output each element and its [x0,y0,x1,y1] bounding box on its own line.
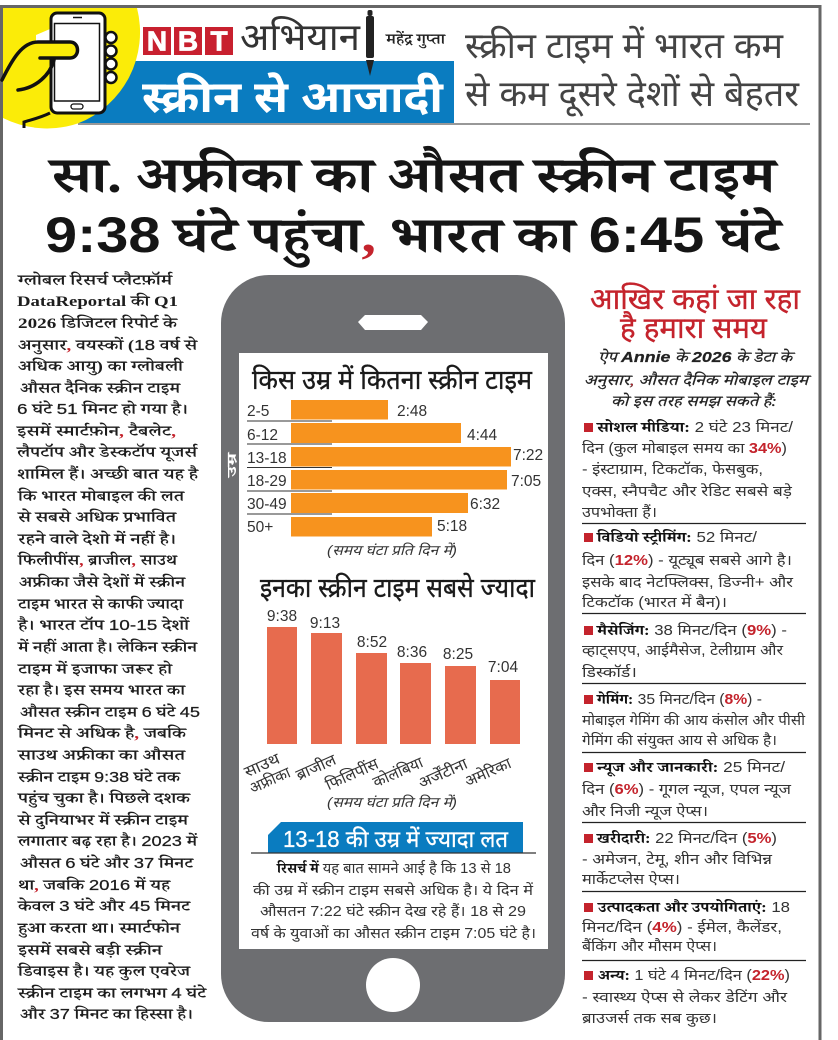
right column heading: आखिर कहां जा रहा [590,282,801,316]
left article text: स्क्रीन टाइम का लगभग 4 घंटे [17,984,207,1002]
item: productivity and utilities: बैंकिंग और मौसम ऐप्स। [582,937,717,955]
left article text: मिनट से अधिक है , जबकि [17,724,187,742]
item: news and information: दिन ( 6%) - गूगल न्यूज, एपल न्यूज [582,781,791,799]
item: shopping: खरीदारी: 22 मिनट/दिन ( 5%) [596,830,777,847]
item: messaging [582,621,787,681]
bar chart: countries: 7:04 [488,659,518,676]
bar chart: countries [242,608,520,797]
bar chart: screen time by age [247,400,543,536]
bar chart: screen time by age: 7:22 [513,447,543,464]
callout text [251,859,536,943]
item: gaming [582,690,805,750]
item: gaming: मोबाइल गेमिंग की आय कंसोल और पीसी [582,711,805,729]
callout text: की उम्र में स्क्रीन टाइम सबसे अधिक है। ये दिन में [253,881,533,899]
bar chart: screen time by age: 2:48 [397,403,427,420]
callout text: औसतन 7:22 घंटे स्क्रीन देख रहे हैं। 18 से 29 [260,902,526,920]
bar chart: countries: अमेरिका [462,753,515,791]
left article text: अधिक आयु) का ग्लोबली [18,358,184,376]
bar chart: screen time by age: 6-12 [247,427,278,444]
header subheading [465,25,800,117]
chart note: hours per day: (समय घंटा प्रति दिन में) [327,794,457,810]
callout heading: teen addiction: 13-18 की उम्र में ज्यादा लत [283,826,509,852]
item: social media: एक्स, स्नैपचैट और रेडिट सबसे बड़े [582,482,792,500]
NBT logo: B [178,26,198,56]
left article text: और 37 मिनट का हिस्सा है। [20,1005,193,1023]
header rule [78,123,810,125]
left article text: लगातार बढ़ रहा है। 2023 में [17,832,199,850]
left article text: रहने वाले देशो में नहीं है। [17,530,176,548]
item: video streaming: विडियो स्ट्रीमिंग: 52 मिनट/ [596,528,758,546]
item: video streaming [582,528,794,611]
left article text: पहुंच चुका है। पिछले दशक [17,789,191,808]
left article text: लैपटॉप और डेस्कटॉप यूजर्स [16,443,198,462]
header subheading: स्क्रीन टाइम में भारत कम [465,25,784,66]
right column heading [590,282,801,345]
left article text: फिलीपींस , ब्राजील , साउथ [17,551,178,569]
bar chart: screen time by age: 13-18 [247,450,287,467]
left article text: 6 घंटे 51 मिनट हो गया है। [17,400,188,418]
item: messaging: व्हाट्सएप, आईमैसेज, टेलीग्राम और [582,641,784,660]
left article text: डिवाइस है। यह कुल एवरेज [17,962,192,981]
left article text: में नहीं आता है। लेकिन स्क्रीन [17,638,198,656]
item: productivity and utilities: उत्पादकता और उपयोगिताएं: 18 [597,899,790,916]
NBT logo [143,26,233,56]
bar chart: screen time by age: 4:44 [467,427,498,444]
left article text: औसत स्क्रीन टाइम 6 घंटे 45 [20,703,200,721]
left article text: 2026 डिजिटल रिपोर्ट के [18,314,178,332]
left article text: हुआ करता था। स्मार्टफोन [17,919,181,938]
left article text: कि भारत मोबाइल की लत [17,487,186,505]
item: social media: उपभोक्ता हैं। [582,504,657,521]
item: others: - स्वास्थ्य ऐप्स से लेकर डेटिंग और [582,988,788,1006]
item: others: अन्य: 1 घंटे 4 मिनट/दिन ( 22% ) [598,966,790,984]
item: social media [582,418,794,521]
left article text: केवल 3 घंटे और 45 मिनट [17,897,191,915]
bar chart: countries: ब्राजील [293,750,339,784]
bar chart: countries: 8:25 [443,646,473,663]
left article text: है। भारत टॉप 10-15 देशों [17,616,190,634]
item: messaging: डिस्कॉर्ड। [582,664,637,681]
item: shopping: मार्केटप्लेस ऐप्स। [582,870,680,888]
bar chart: countries: अफ्रीका [247,763,294,797]
callout heading: teen addiction [251,822,536,853]
item: social media: - इंस्टाग्राम, टिकटॉक, फेसबुक, [582,460,763,479]
chart heading: highest screen time: इनका स्क्रीन टाइम सबसे ज्यादा [260,572,536,603]
panel: phone body [221,275,565,1022]
left article text: टाइम में इजाफा जरूर हो [17,660,173,678]
icon: hand holding phone on yellow circle [2,8,140,128]
left article text: रहा है। इस समय भारत का [17,681,186,699]
bar chart: countries: साउथ [242,750,284,781]
right column intro: को इस तरह समझ सकते हैं: [611,392,777,410]
item: messaging: मैसेजिंग: 38 मिनट/दिन ( 9%) - [596,621,787,639]
left article text: साउथ अफ्रीका का औसत [17,746,187,764]
campaign name: अभियान [240,15,361,59]
left article text: ग्लोबल रिसर्च प्लैटफ़ॉर्म [17,271,174,289]
left article text: औसत दैनिक स्क्रीन टाइम [20,379,182,397]
bar chart: screen time by age: 7:05 [511,473,541,490]
item: gaming: गेमिंग: 35 मिनट/दिन ( 8%) - [596,690,762,708]
left article text: इसमें सबसे बड़ी स्क्रीन [17,941,163,959]
item: productivity and utilities [582,899,790,955]
bar chart: screen time by age: 2-5 [247,403,269,420]
right column heading: है हमारा समय [620,310,768,345]
left article text [16,271,207,1023]
right column intro: अनुसार , औसत दैनिक मोबाइल टाइम [584,371,812,390]
left article text: स्क्रीन टाइम 9:38 घंटे तक [17,768,181,786]
item: news and information: और निजी न्यूज ऐप्स। [582,802,708,821]
left article text: अनुसार , वयस्कों ( 18 वर्ष से [18,336,198,355]
right column intro: ऐप Annie के 2026 के डेटा के [598,348,796,366]
bar chart: screen time by age: 18-29 [247,473,287,490]
chart note: hours per day: (समय घंटा प्रति दिन में) [327,542,457,558]
item: others [582,966,790,1028]
icon: pen [366,10,374,76]
item: video streaming: दिन ( 12% ) - यूट्यूब सबसे आगे है। [582,551,792,570]
left article text: अफ्रीका जैसे देशों में स्क्रीन [19,573,186,591]
bar chart: countries: 9:13 [310,615,340,632]
bar chart: countries: फिलिपींस [323,755,382,794]
campaign title: स्क्रीन से आजादी [142,71,444,122]
left article text: शामिल हैं। अच्छी बात यह है [17,465,200,483]
callout text: रिसर्च में यह बात सामने आई है कि 13 से 18 [276,859,511,877]
chart heading: screen time by age: किस उम्र में कितना स्क्रीन टाइम [252,364,533,395]
item: shopping [582,830,777,888]
bar chart: countries: कोलंबिया [370,753,427,791]
left article text: था, जबकि 2016 में यह [18,876,172,894]
bar chart: screen time by age: 30-49 [247,496,287,513]
left article text: औसत 6 घंटे और 37 मिनट [20,854,194,872]
NBT logo: N [147,26,167,56]
left article text: से दुनियाभर में स्क्रीन टाइम [17,811,190,830]
bar chart: screen time by age: 50+ [247,519,273,536]
item: social media: दिन (कुल मोबाइल समय का 34%) [582,440,787,458]
item: shopping: - अमेजन, टेमू, शीन और विभिन्न [582,850,773,869]
rotated age label: उम्र [224,451,239,479]
item: video streaming: इसके बाद नेटफ्लिक्स, डिज्नी+ और [582,573,794,591]
main headline: सा. अफ्रीका का औसत स्क्रीन टाइम [47,147,779,203]
bar chart: countries: 8:52 [357,634,387,651]
item: social media: सोशल मीडिया: 2 घंटे 23 मिनट/ [596,418,794,436]
item: news and information: न्यूज और जानकारी: 25 मिनट/ [596,759,786,777]
bar chart: screen time by age: 5:18 [437,518,467,535]
bar chart: screen time by age: 6:32 [470,496,500,513]
bar chart: countries: 9:38 [267,608,297,625]
callout text: वर्ष के युवाओं का औसत स्क्रीन टाइम 7:05 घंटे है। [251,924,536,943]
main headline [45,147,784,268]
left article text: टाइम भारत से काफी ज्यादा [17,595,184,613]
campaign banner: blue band [78,61,454,123]
left article text: से सबसे अधिक प्रभावित [17,508,178,526]
item: video streaming: टिकटॉक (भारत में बैन)। [582,594,727,611]
bar chart: countries: 8:36 [397,644,427,661]
header subheading: से कम दूसरे देशों से बेहतर [465,73,800,117]
item: news and information [582,759,791,821]
bar chart: countries: अर्जेंटीना [416,754,471,792]
main headline: 9:38 घंटे पहुंचा , भारत का 6:45 घंटे [45,207,784,268]
NBT logo: T [210,26,228,56]
left article text: इसमें स्मार्टफ़ोन , टैबलेट , [16,422,176,440]
item: productivity and utilities: मिनट/दिन ( 4%) - ईमेल, कैलेंडर, [582,918,782,936]
right column intro [584,348,812,410]
item: gaming: गेमिंग की संयुक्त आय से अधिक है। [582,731,777,750]
item: others: ब्राउजर्स तक सब कुछ। [582,1010,717,1028]
left article text: DataReportal की Q1 [17,292,178,310]
author byline: महेंद्र गुप्ता [385,30,446,49]
